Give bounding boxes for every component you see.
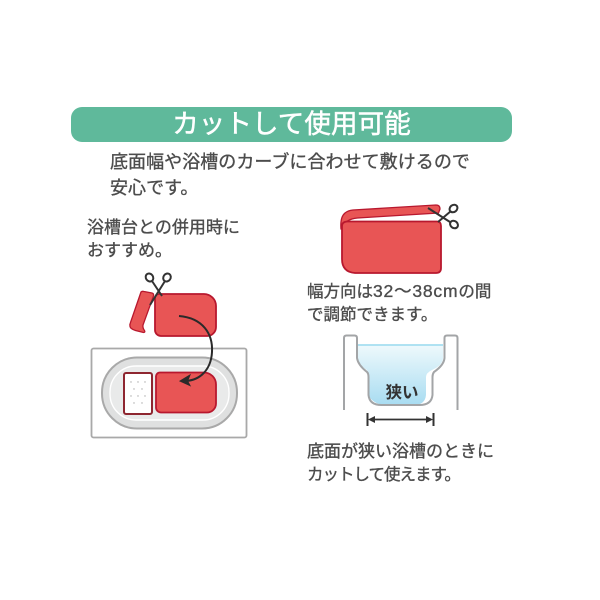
mat placed in tub [156,372,216,412]
right note text: narrow tub [307,442,494,484]
tub profile [344,336,458,410]
water [358,345,443,405]
right note text: narrow tub: 底面が狭い浴槽のときに [307,442,494,461]
left note text: 浴槽台との併用時に [87,218,240,237]
width arrow [368,413,434,426]
right note text: width range [307,281,491,324]
intro text: 底面幅や浴槽のカーブに合わせて敷けるので [110,152,470,172]
cut mat [155,294,216,336]
bathtub basin [102,358,237,428]
scissors [428,203,459,230]
right note text: width range: で調節できます。 [307,306,437,324]
label: narrow: 狭い [386,383,418,402]
right diagram: trimmed mat [341,203,459,273]
title banner [71,107,512,142]
right note text: narrow tub: カットして使えます。 [307,466,460,484]
bathtub inner line [110,366,229,420]
cut-off strip [130,291,154,332]
mat body [342,222,441,273]
mat folded strip [341,205,440,229]
bath stool pad [124,373,152,414]
intro text [110,152,470,198]
left note text [87,218,240,260]
left diagram: mat in bathtub [92,272,246,438]
scissors [144,272,172,305]
water surface line [358,344,443,346]
intro text: 安心です。 [110,178,198,198]
left note text: おすすめ。 [87,240,172,260]
curved arrow [179,316,212,386]
right diagram: narrow tub [344,336,458,426]
title banner: カットして使用可能 [172,109,411,139]
bathtub frame [92,348,246,438]
right note text: width range: 幅方向は32～38cmの間 [307,281,491,301]
